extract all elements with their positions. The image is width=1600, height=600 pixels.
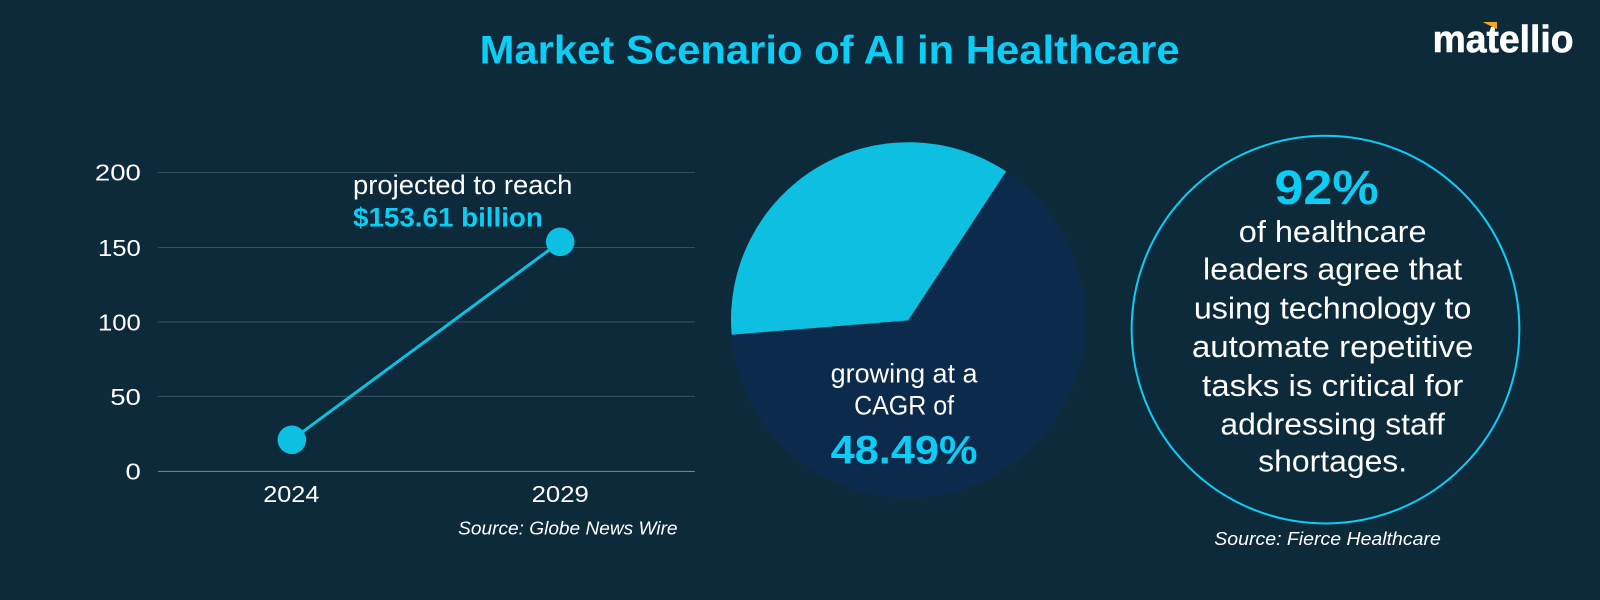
x axis labels: 2024 xyxy=(263,481,319,507)
pie label: growing at a xyxy=(831,359,978,389)
data line xyxy=(292,242,560,440)
y axis labels: 150 xyxy=(98,235,141,261)
source: Fierce Healthcare: Source: Fierce Healthcare xyxy=(1214,528,1441,549)
x axis labels: 2029 xyxy=(532,481,589,507)
stat description: addressing staff xyxy=(1220,408,1445,442)
stat circle xyxy=(1132,136,1519,523)
data point 2024 xyxy=(278,426,306,454)
stat description: shortages. xyxy=(1258,444,1407,478)
pie label: 48.49% xyxy=(831,428,978,472)
stat description: automate repetitive xyxy=(1192,330,1473,364)
y axis labels: 200 xyxy=(95,160,141,186)
line chart xyxy=(95,160,695,507)
stat description: using technology to xyxy=(1194,291,1471,325)
callout: projected value: projected to reach xyxy=(353,170,572,200)
pie label xyxy=(831,359,978,472)
stat description: leaders agree that xyxy=(1203,253,1463,287)
stat description: tasks is critical for xyxy=(1202,369,1463,403)
pie chart xyxy=(731,142,1086,498)
source: Globe News Wire: Source: Globe News Wire xyxy=(458,518,678,539)
stat value: 92% xyxy=(1274,162,1379,215)
data point 2029 xyxy=(546,228,574,256)
y axis labels: 0 xyxy=(126,459,141,485)
y axis labels: 50 xyxy=(110,384,141,410)
pie label: CAGR of xyxy=(854,390,955,420)
title: Market Scenario of AI in Healthcare xyxy=(480,28,1180,72)
y axis labels: 100 xyxy=(98,310,141,336)
callout: projected value: $153.61 billion xyxy=(353,203,543,233)
y axis labels xyxy=(95,160,141,485)
stat description xyxy=(1192,215,1473,478)
stat description: of healthcare xyxy=(1239,215,1427,249)
callout: projected value xyxy=(353,170,572,233)
logo: matellio: matellio xyxy=(1433,18,1573,60)
x axis labels xyxy=(263,481,589,507)
